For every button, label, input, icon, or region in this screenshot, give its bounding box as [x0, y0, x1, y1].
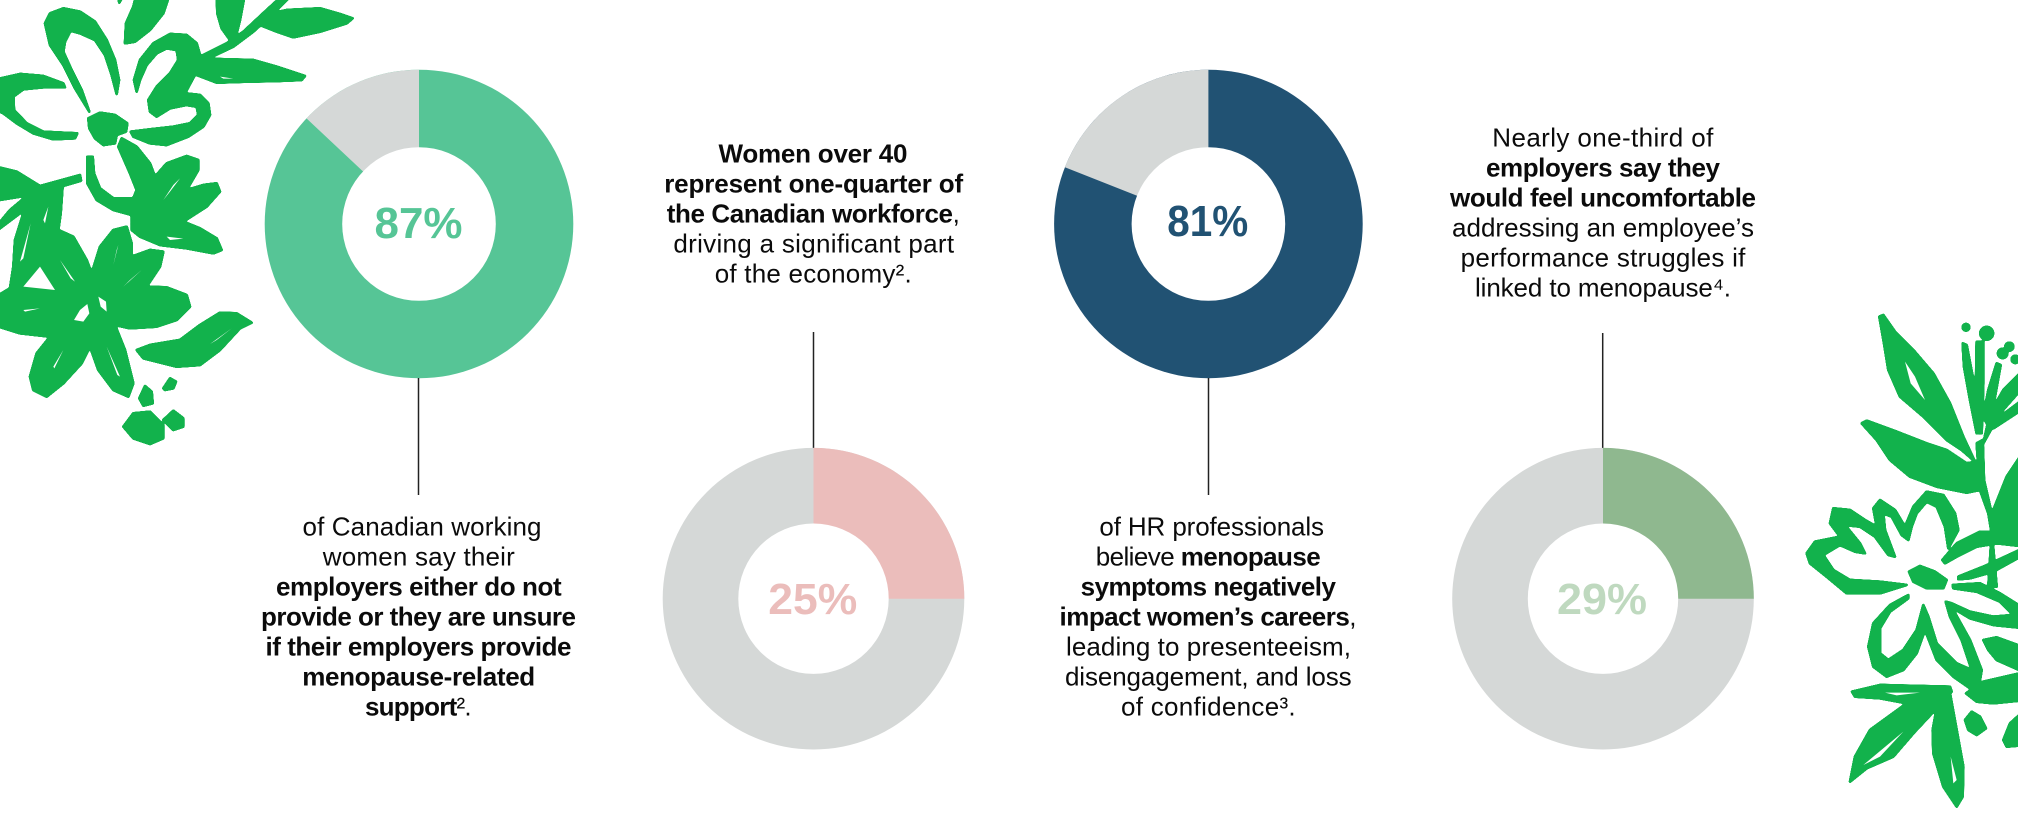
botanical illustration: right side — [1807, 315, 2018, 807]
botanical illustration: top left — [0, 0, 353, 444]
text block: nearly one-third: performance struggles if — [1461, 243, 1746, 273]
text block: 81% description — [1060, 512, 1356, 722]
text block: 87% description: support². — [365, 692, 472, 722]
ring segment: 87% green — [265, 70, 573, 378]
text block: 81% description: impact women’s careers, — [1060, 602, 1356, 632]
text block: 81% description: of confidence³. — [1121, 692, 1296, 722]
donut chart: 87% — [265, 70, 573, 378]
text block: nearly one-third: employers say they — [1486, 153, 1721, 183]
ring segment: 81% navy — [1054, 70, 1363, 378]
text block: 87% description: women say their — [322, 542, 515, 572]
text block: 87% description: provide or they are unsure — [261, 602, 576, 632]
value: 29%: 29% — [1557, 575, 1647, 624]
text block: women over 40: the Canadian workforce, — [667, 198, 960, 228]
text block: nearly one-third: linked to menopause⁴. — [1475, 273, 1731, 303]
text block: women over 40: driving a significant part — [673, 228, 955, 258]
text block: 81% description: symptoms negatively — [1081, 572, 1336, 602]
text block: 87% description: if their employers provide — [266, 632, 572, 662]
donut chart: 29% — [1452, 448, 1754, 750]
ring segment: remaining grey — [1065, 70, 1208, 224]
text block: nearly one-third: Nearly one-third of — [1492, 123, 1714, 153]
ring: remaining grey — [1452, 448, 1754, 750]
text block: 81% description: leading to presenteeism, — [1066, 632, 1351, 662]
text block: 81% description: of HR professionals — [1099, 512, 1324, 542]
text block: nearly one-third: addressing an employee’s — [1452, 213, 1754, 243]
ring segment: 29% sage green — [1603, 448, 1754, 599]
text block: women over 40: represent one-quarter of — [664, 168, 964, 198]
ring segment: 25% pink — [814, 448, 964, 599]
ring: remaining grey — [663, 448, 964, 750]
text block: nearly one-third — [1449, 123, 1756, 303]
text block: nearly one-third: would feel uncomfortable — [1449, 183, 1756, 213]
text block: women over 40: Women over 40 — [718, 138, 908, 168]
value: 81%: 81% — [1167, 197, 1248, 246]
text block: 81% description: believe menopause — [1096, 542, 1321, 572]
text block: 87% description: menopause-related — [302, 662, 535, 692]
text block: women over 40: of the economy². — [715, 258, 912, 288]
value: 25%: 25% — [768, 575, 857, 624]
text block: 87% description — [261, 512, 576, 722]
text block: 87% description: of Canadian working — [302, 512, 542, 542]
donut chart: 25% — [663, 448, 964, 750]
text block: 81% description: disengagement, and loss — [1065, 662, 1352, 692]
text block: 87% description: employers either do not — [276, 572, 562, 602]
ring segment: remaining grey — [306, 70, 419, 224]
text block: women over 40 — [664, 138, 964, 288]
donut chart: 81% — [1054, 70, 1363, 378]
value: 87%: 87% — [374, 199, 462, 248]
